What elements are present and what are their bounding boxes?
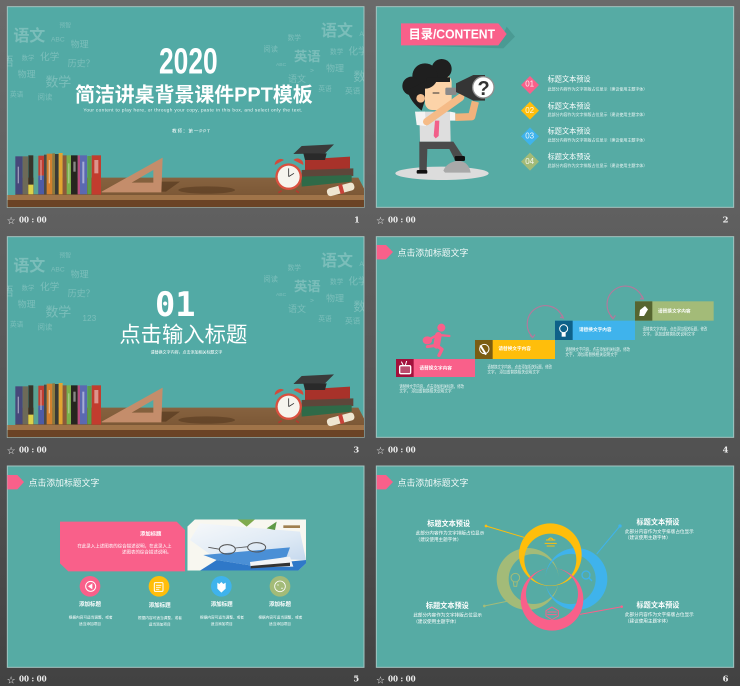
item 2: 适当添加项目 xyxy=(149,622,171,627)
panel: slide 5 image and four items xyxy=(7,466,364,667)
contents item 01: 01 xyxy=(525,79,535,88)
step 3 blue xyxy=(555,321,635,358)
background subject words: 数学 xyxy=(330,47,344,56)
background subject words: 英语 xyxy=(294,278,321,294)
background subject words: 物理 xyxy=(326,292,344,303)
item 4: 添加标题 xyxy=(269,600,291,608)
pink text card: 述图表的综合描述说明。 xyxy=(122,549,171,556)
background subject words: > xyxy=(310,68,314,75)
callout: top right xyxy=(597,517,694,554)
contents item 04: 04 xyxy=(525,157,535,166)
item 3: 添加标题 xyxy=(211,600,233,608)
background subject words: 英语 xyxy=(10,90,24,99)
background subject words: > xyxy=(310,298,314,305)
contents item 01: 标题文本预设 xyxy=(548,75,591,84)
background subject words: 语文 xyxy=(13,26,45,45)
callout: bottom right: 此部分内容作为文字排版占位显示 xyxy=(625,611,694,618)
footer: slide 1: ☆ xyxy=(7,216,16,227)
footer: slide 5: 5 xyxy=(353,674,359,684)
background subject words: 语文 xyxy=(288,73,306,84)
step 2 yellow: 请替换文字内容 xyxy=(498,345,531,352)
icon: green ring bulb xyxy=(511,573,520,586)
background subject words xyxy=(2,251,378,331)
footer: slide 4 xyxy=(376,444,729,457)
background subject words: 物理 xyxy=(71,268,89,279)
background subject words: 预智 xyxy=(59,251,71,259)
contents item 03 xyxy=(521,127,647,145)
slide heading xyxy=(377,475,468,489)
contents item 03: 此部分内容作为文字排版占位显示（建议使用主题字体） xyxy=(548,136,647,142)
icon: running figure xyxy=(423,324,449,355)
icon: pink ring box xyxy=(546,607,558,620)
step 1 pink xyxy=(396,359,475,395)
step 4 green xyxy=(635,301,714,337)
contents item 03: 标题文本预设 xyxy=(548,127,591,136)
step 1 pink: 请替换文字内容，点击添加相关标题，修改 xyxy=(399,383,464,390)
background subject words: 阅读 xyxy=(263,275,279,284)
background subject words: 英语 xyxy=(345,86,361,96)
background subject words: ABC xyxy=(276,62,287,68)
cover teacher: 教师：第一PPT xyxy=(172,127,210,134)
background subject words: 语文 xyxy=(13,256,45,275)
background subject words: ABC xyxy=(51,266,65,273)
footer: slide 3: ☆ xyxy=(7,446,16,457)
panel: slide 4 staircase xyxy=(376,237,734,437)
callout: bottom left xyxy=(413,601,507,625)
item 3: 适当添加项目 xyxy=(211,621,233,626)
background subject words: 语 xyxy=(2,55,14,69)
footer: slide 4: 4 xyxy=(723,444,729,454)
callout: top right: （建议使用主题字体） xyxy=(625,534,671,541)
step 2 yellow: 文字， 添加或替换相关说明文字 xyxy=(487,368,540,375)
footer: slide 6: 6 xyxy=(723,674,729,684)
background subject words: 化学 xyxy=(40,51,60,63)
cover year: 2020 xyxy=(159,40,218,81)
slide heading: 点击添加标题文字 xyxy=(398,477,468,488)
slide heading xyxy=(377,245,468,259)
step 3 blue: 文字， 添加或替换相关说明文字 xyxy=(565,351,618,358)
item 1 xyxy=(69,576,113,626)
background subject words: 数学 xyxy=(353,69,378,84)
item 4: 适当添加项目 xyxy=(269,621,291,626)
slide heading: 点击添加标题文字 xyxy=(29,477,99,488)
item 1: 添加标题 xyxy=(79,600,101,608)
pink text card xyxy=(60,522,185,571)
background subject words: 阅读 xyxy=(263,45,279,54)
cover subtitle: Your content to play here, or through your copy, paste in this box, and select only the text. xyxy=(83,107,302,112)
contents item 04: 标题文本预设 xyxy=(548,152,591,161)
background subject words: 物理 xyxy=(18,68,36,79)
item 2: 添加标题 xyxy=(149,601,171,609)
footer: slide 4: 00 : 00 xyxy=(388,445,416,455)
background subject words: 数学 xyxy=(330,277,344,286)
chart: four overlapping rings xyxy=(497,523,607,631)
step 1 pink: 文字， 添加或替换相关说明文字 xyxy=(399,388,452,395)
background subject words: 数学 xyxy=(45,305,71,320)
slide heading xyxy=(7,475,99,489)
step 4 green: 请替换文字内容 xyxy=(658,308,691,315)
background subject words: 预智 xyxy=(59,21,71,29)
arrow: arc step 3 to 4 xyxy=(607,286,643,319)
footer: slide 6 xyxy=(376,674,729,686)
background subject words: 历史？ xyxy=(68,58,95,69)
callout: bottom left: （建议使用主题字体） xyxy=(413,618,459,625)
contents item 01: 此部分内容作为文字排版占位显示（建议使用主题字体） xyxy=(548,86,647,92)
panel: slide 2 contents xyxy=(376,7,734,207)
callout: bottom left: 标题文本预设 xyxy=(426,601,469,610)
background subject words: A xyxy=(359,31,364,38)
footer: slide 1 xyxy=(7,214,360,227)
background subject words: 英语 xyxy=(318,84,332,93)
background subject words: 化学 xyxy=(40,281,60,293)
background subject words: 化学 xyxy=(348,46,368,58)
background subject words: 英语 xyxy=(294,48,321,64)
step 4 green: 请替换文字内容，点击添加相关标题，修改 xyxy=(643,325,708,332)
background subject words: 物理 xyxy=(18,298,36,309)
footer: slide 1: 00 : 00 xyxy=(19,215,47,225)
slide heading: 点击添加标题文字 xyxy=(398,247,468,258)
background subject words xyxy=(2,21,378,101)
background subject words: 语文 xyxy=(321,251,353,270)
photo: glasses on a book xyxy=(187,519,306,571)
background subject words: 语文 xyxy=(288,303,306,314)
footer: slide 3 xyxy=(7,444,359,457)
background subject words: ABC xyxy=(51,36,65,43)
background subject words: 物理 xyxy=(71,38,89,49)
contents item 02: 02 xyxy=(525,106,535,115)
background subject words: 语 xyxy=(2,285,14,299)
item 3: 根据内容可适当调整，或者 xyxy=(200,614,244,619)
item 4 xyxy=(258,576,303,626)
background subject words: 英语 xyxy=(318,314,332,323)
callout: top left: （建议使用主题字体） xyxy=(416,536,461,543)
item 2: 根据内容可适当调整，或者 xyxy=(138,615,182,620)
background subject words: 语文 xyxy=(321,21,353,40)
contents item 01 xyxy=(521,75,647,94)
step 3 blue: 请替换文字内容，点击添加相关标题，修改 xyxy=(565,346,630,353)
background subject words: 物理 xyxy=(326,62,344,73)
footer: slide 5 xyxy=(7,674,359,686)
callout: top left: 此部分内容作为文字排版占位显示 xyxy=(416,530,485,537)
callout: top right: 标题文本预设 xyxy=(637,517,679,526)
callout: top right: 此部分内容作为文字排版占位显示 xyxy=(625,528,694,535)
footer: slide 5: 00 : 00 xyxy=(19,675,47,685)
footer: slide 2: ☆ xyxy=(376,216,385,227)
background subject words: 数学 xyxy=(288,263,301,272)
background subject words: 阅读 xyxy=(38,322,53,331)
callout: bottom left: 此部分内容作为文字排版占位显示 xyxy=(413,612,482,619)
background subject words: 数学 xyxy=(22,283,34,292)
footer: slide 6: 00 : 00 xyxy=(388,675,416,685)
icon: yellow ring xyxy=(545,538,557,546)
step 1 pink: 请替换文字内容 xyxy=(419,364,452,371)
pink text card: 添加标题 xyxy=(140,529,162,537)
cover title: 简洁讲桌背景课件PPT模板 xyxy=(75,83,313,106)
background subject words: 英语 xyxy=(345,316,361,326)
contents item 02 xyxy=(521,101,647,120)
background subject words: 阅读 xyxy=(38,92,53,101)
background subject words: ABC xyxy=(276,292,287,298)
background subject words: 数学 xyxy=(22,53,34,62)
footer: slide 3: 3 xyxy=(353,444,359,454)
contents ribbon xyxy=(401,23,515,48)
step 2 yellow: 请替换文字内容，点击添加相关标题，修改 xyxy=(487,364,552,371)
background subject words: 历史？ xyxy=(68,288,95,299)
footer: slide 1: 1 xyxy=(354,214,360,224)
contents item 02: 此部分内容作为文字排版占位显示（建议使用主题字体） xyxy=(548,111,647,117)
item 1: 根据内容可适当调整，或者 xyxy=(69,614,113,619)
contents item 02: 标题文本预设 xyxy=(548,101,591,110)
item 1: 适当添加项目 xyxy=(79,621,101,626)
panel: slide 1 cover xyxy=(2,7,378,207)
callout: bottom right: 标题文本预设 xyxy=(637,600,679,609)
section subtitle: 请替换文字内容，点击添加相关标题文字 xyxy=(151,349,222,355)
background subject words: 数学 xyxy=(45,75,71,90)
section title: 点击输入标题 xyxy=(119,323,247,347)
arrow: arc step 2 to 3 xyxy=(527,306,563,338)
contents item 04: 此部分内容作为文字排版占位显示（建议使用主题字体） xyxy=(548,162,647,168)
background subject words: 123 xyxy=(82,313,97,323)
contents item 03: 03 xyxy=(525,132,535,141)
footer: slide 2 xyxy=(376,214,729,227)
illustration: man with telescope: ? xyxy=(478,78,490,100)
background subject words: 英语 xyxy=(10,320,24,329)
panel: slide 3 section title xyxy=(2,237,378,437)
item 4: 根据内容可适当调整，或者 xyxy=(258,614,303,619)
step 4 green: 文字， 添加或替换相关说明文字 xyxy=(643,330,696,337)
callout: bottom right: （建议使用主题字体） xyxy=(625,617,671,624)
footer: slide 2: 00 : 00 xyxy=(388,215,416,225)
callout: top left xyxy=(416,519,524,543)
footer: slide 4: ☆ xyxy=(376,446,385,457)
panel: slide 6 interlocking rings xyxy=(376,466,734,667)
contents ribbon: 目录/CONTENT xyxy=(409,28,495,42)
footer: slide 2: 2 xyxy=(723,214,729,224)
icon: blue ring magnifier xyxy=(582,571,592,581)
background subject words: A xyxy=(359,261,364,268)
section number: 01 xyxy=(155,285,196,324)
background subject words: 数学 xyxy=(353,299,378,314)
item 2 xyxy=(138,576,182,627)
step 3 blue: 请替换文字内容 xyxy=(579,326,612,333)
pink text card: 在此录入上述图表的综合描述说明，在此录入上 xyxy=(77,542,172,549)
desk with books, ruler, clock xyxy=(7,374,364,437)
background subject words: 数学 xyxy=(288,33,301,42)
desk with books, ruler, clock xyxy=(7,144,364,207)
footer: slide 3: 00 : 00 xyxy=(19,445,47,455)
item 3 xyxy=(200,576,244,626)
contents item 04 xyxy=(521,152,647,171)
step 2 yellow xyxy=(475,340,555,375)
illustration: man with telescope xyxy=(395,59,494,180)
callout: top left: 标题文本预设 xyxy=(427,519,470,528)
background subject words: 化学 xyxy=(348,276,368,288)
callout: bottom right xyxy=(580,600,694,624)
